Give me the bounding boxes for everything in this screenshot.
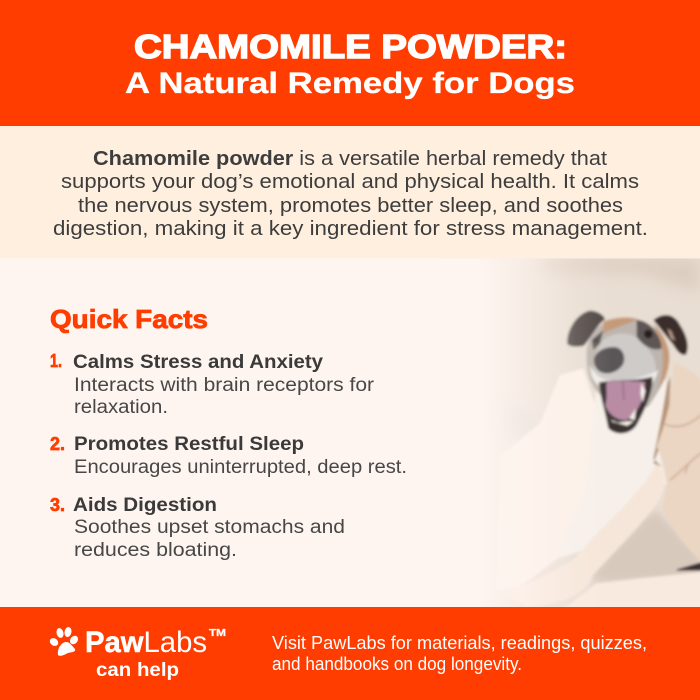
fact 3: Soothes upset stomachs and bbox=[74, 517, 345, 538]
fact 2: Promotes Restful Sleep bbox=[74, 434, 304, 455]
fact 3: 3. bbox=[50, 495, 65, 515]
fact 2: Encourages uninterrupted, deep rest. bbox=[74, 457, 407, 478]
left fade overlay bbox=[440, 258, 600, 607]
neck shadow bbox=[653, 377, 671, 467]
fact 3: Aids Digestion bbox=[73, 495, 217, 516]
fact 1: 1. bbox=[50, 351, 62, 371]
left blanket bbox=[523, 369, 595, 578]
intro text: supports your dog’s emotional and physical health. It calms bbox=[61, 171, 639, 193]
logo wordmark bbox=[85, 626, 226, 681]
logo wordmark: can help bbox=[96, 660, 179, 681]
fact 1 bbox=[50, 351, 375, 418]
page background bbox=[0, 258, 700, 607]
right blanket bbox=[657, 362, 700, 565]
quick facts heading: Quick Facts bbox=[50, 304, 208, 334]
logo wordmark: TM bbox=[209, 628, 226, 639]
title: A Natural Remedy for Dogs bbox=[125, 67, 575, 100]
dog front leg bbox=[554, 465, 664, 600]
tongue bbox=[605, 381, 645, 420]
photo: dog under blanket bbox=[509, 258, 700, 607]
teeth bbox=[605, 383, 645, 426]
eye patch bbox=[637, 320, 662, 349]
ear right bbox=[653, 315, 688, 355]
icon: paw print bbox=[48, 626, 80, 656]
eye bbox=[644, 330, 653, 338]
fact 2: 2. bbox=[50, 434, 65, 454]
header band bbox=[0, 0, 700, 126]
dog head bbox=[567, 311, 688, 433]
footer text: and handbooks on dog longevity. bbox=[272, 654, 522, 674]
nose bbox=[594, 347, 624, 373]
sofa bbox=[568, 572, 700, 607]
fact 1: relaxation. bbox=[74, 397, 168, 418]
dog chest bbox=[553, 380, 667, 560]
skull bbox=[586, 318, 669, 408]
intro text bbox=[53, 148, 648, 240]
fact 3 bbox=[50, 495, 345, 561]
fact 1: Calms Stress and Anxiety bbox=[73, 352, 323, 373]
footer band bbox=[0, 607, 700, 700]
fact 2 bbox=[50, 434, 407, 478]
fact 3: reduces bloating. bbox=[74, 540, 237, 561]
intro text: the nervous system, promotes better sleep, and soothes bbox=[78, 195, 623, 217]
fact 1: Interacts with brain receptors for bbox=[74, 375, 375, 396]
footer text: Visit PawLabs for materials, readings, quizzes, bbox=[272, 633, 647, 653]
tan crown bbox=[603, 318, 669, 390]
intro text: digestion, making it a key ingredient for stress management. bbox=[53, 218, 648, 240]
mouth bbox=[599, 377, 652, 433]
ear left bbox=[567, 311, 605, 347]
grey muzzle bbox=[594, 333, 656, 383]
intro text: Chamomile powder is a versatile herbal remedy that bbox=[93, 148, 607, 170]
title bbox=[125, 28, 575, 100]
logo wordmark: PawLabs bbox=[85, 626, 207, 659]
footer text bbox=[272, 633, 647, 674]
title: CHAMOMILE POWDER: bbox=[134, 28, 567, 65]
intro band bbox=[0, 126, 700, 258]
